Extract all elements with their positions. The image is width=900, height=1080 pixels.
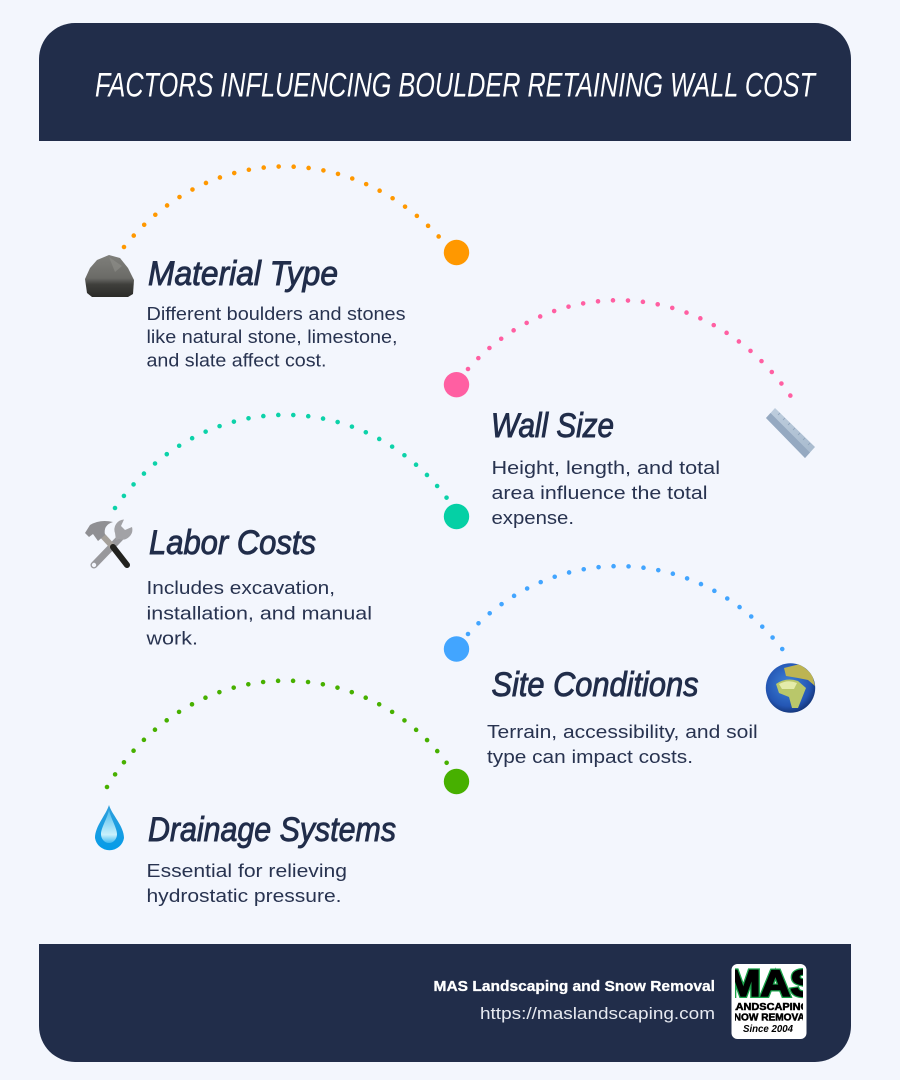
dotted arc: wall size [468,300,792,398]
panel: drainage systems [95,681,469,906]
dotted arc: drainage systems [107,681,449,787]
wrench head [114,520,132,540]
icon: globe [765,663,815,714]
logo: MAS [726,963,818,1004]
logo: Since 2004 [743,1023,793,1035]
hammer shaft [101,534,113,547]
icon: ruler [766,408,815,458]
node: blue [444,636,469,662]
description: site conditions [487,721,758,767]
description: drainage systems: Essential for relieving [146,860,347,881]
panel: wall size [444,300,815,528]
description: wall size: Height, length, and total [492,457,720,478]
node: green [444,769,469,794]
hammer head [85,521,113,541]
panel: labor costs [85,415,469,648]
icon: boulder [85,255,134,297]
header banner [39,23,851,141]
description: labor costs: installation, and manual [146,602,372,624]
icon: water drop [95,805,124,850]
description: material type: Different boulders and stones [146,303,406,324]
panel: site conditions [444,566,815,767]
description: labor costs [145,577,372,648]
logo: LANDSCAPING [729,1002,809,1013]
heading: site conditions: Site Conditions [492,666,698,704]
description: site conditions: type can impact costs. [487,746,693,767]
description: labor costs: Includes excavation, [146,577,335,598]
heading: material type: Material Type [148,255,338,293]
node: pink [444,372,469,397]
heading: labor costs: Labor Costs [149,524,316,562]
description: wall size: expense. [492,507,574,528]
heading: wall size: Wall Size [491,407,614,445]
description: drainage systems: hydrostatic pressure. [146,885,342,906]
company name: MAS Landscaping and Snow Removal [434,978,715,995]
panel: material type [85,166,469,370]
description: wall size [492,457,720,528]
icon: hammer and wrench [85,520,132,567]
description: drainage systems [146,860,347,906]
wrench handle [94,538,120,565]
footer banner [39,944,851,1062]
description: material type [146,303,406,370]
dotted arc: site conditions [468,566,783,650]
description: labor costs: work. [145,628,198,648]
logo: SNOW REMOVAL [727,1012,811,1024]
dotted arc: material type [124,166,441,247]
description: material type: and slate affect cost. [146,350,326,370]
description: material type: like natural stone, limestone, [146,326,398,347]
dotted arc: labor costs [115,415,449,508]
logo [732,964,806,1039]
description: wall size: area influence the total [492,482,708,503]
website url: https://maslandscaping.com [480,1005,715,1023]
heading: drainage systems: Drainage Systems [148,811,396,849]
logo: MAS [726,963,818,1004]
description: site conditions: Terrain, accessibility, and soil [487,721,758,742]
node: orange [444,240,469,265]
node: teal [444,504,469,529]
